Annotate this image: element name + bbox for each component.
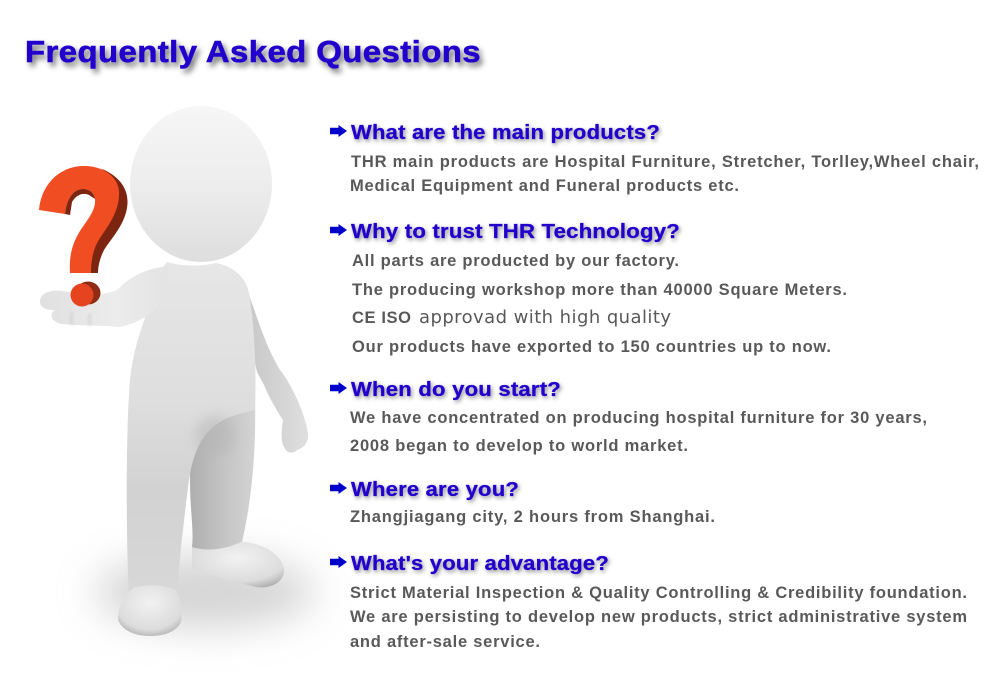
answer text: We are persisting to develop new products, strict administrative system [350,608,967,626]
arrow icon [330,556,347,568]
illustration: white figure holding a question mark [39,106,315,636]
far foot [192,542,284,587]
answer text [350,584,967,651]
far arm and hand [240,285,308,453]
question heading: Why to trust THR Technology? [351,221,680,243]
title: Frequently Asked Questions [25,34,481,69]
answer text: approvad with high quality [419,307,671,328]
answer text: Strict Material Inspection & Quality Controlling & Credibility foundation. [350,584,967,602]
FAQ 5 [330,553,967,651]
head [130,106,272,262]
crotch shading [195,416,235,456]
question heading: What are the main products? [351,122,660,144]
question heading: When do you start? [351,379,561,401]
question mark dot [76,282,100,304]
answer text: THR main products are Hospital Furniture, Stretcher, Torlley,Wheel chair, [351,153,979,171]
arrow icon [330,125,347,137]
answer text: Our products have exported to 150 countries up to now. [352,338,831,356]
answer text [350,409,927,455]
answer text: Medical Equipment and Funeral products etc. [350,177,739,195]
floor shadow [95,556,315,628]
question heading: What's your advantage? [351,553,609,575]
far leg [190,395,255,550]
FAQ 1 [330,122,979,195]
answer text: All parts are producted by our factory. [352,252,679,270]
question mark [39,166,128,306]
FAQ 2 [330,221,847,356]
FAQ 4 [330,479,715,526]
arrow icon [330,382,347,394]
question heading: Where are you? [351,479,519,501]
question mark inner hook shade [65,189,95,215]
question mark front face [39,166,119,273]
answer text: and after-sale service. [350,633,540,651]
arrow icon [330,224,347,236]
near foot [118,585,181,636]
answer text: The producing workshop more than 40000 Square Meters. [352,281,847,299]
FAQ 3 [330,379,927,455]
answer text: Zhangjiagang city, 2 hours from Shanghai. [350,508,715,526]
arrow icon [330,482,347,494]
answer text [352,252,847,356]
answer text: 2008 began to develop to world market. [350,437,688,455]
question mark side face [88,168,128,273]
near arm and open hand [40,266,168,327]
answer text [350,153,979,195]
answer text: We have concentrated on producing hospital furniture for 30 years, [350,409,927,427]
torso and near leg [127,262,255,600]
answer text: CE ISO [352,309,411,327]
